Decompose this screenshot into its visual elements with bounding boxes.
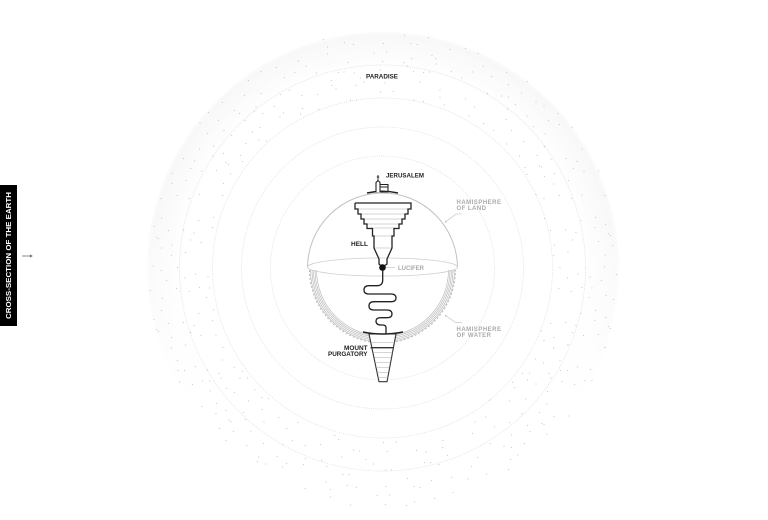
diagram: Mount Purgatory [363, 332, 403, 382]
equator ellipse [308, 258, 458, 276]
icon: Lucifer at centre of the earth [379, 264, 386, 271]
icon: Jerusalem city [367, 175, 398, 193]
label: Paradise: PARADISE [366, 74, 398, 80]
diagram: Hell funnel [355, 203, 411, 266]
outer heaven glow [140, 32, 630, 515]
label: Jerusalem: JERUSALEM [386, 174, 424, 180]
lucifer leader and label [386, 266, 425, 272]
callout: Hamisphere of Water: HAMISPHERE [456, 327, 501, 333]
callout: Hamisphere of Land [445, 200, 501, 222]
label: Hell: HELL [351, 242, 368, 248]
arrow: pointer to diagram [22, 255, 32, 257]
callout: Hamisphere of Land: OF LAND [456, 206, 487, 212]
star field [150, 35, 617, 505]
path: winding tunnel to Purgatory [364, 270, 396, 334]
sidebar tab: cross-section title [0, 185, 17, 326]
lucifer leader and label: LUCIFER [398, 266, 425, 272]
hemisphere of water terraces [310, 270, 456, 343]
hemisphere of land dome [308, 193, 458, 268]
panel: earth cross-section [308, 175, 458, 382]
callout: Hamisphere of Land: HAMISPHERE [456, 200, 501, 206]
callout: Hamisphere of Water: OF WATER [456, 333, 492, 339]
concentric sphere rings [180, 65, 586, 471]
label: Mount Purgatory [328, 346, 368, 358]
panel: celestial spheres background [140, 32, 630, 515]
label: Mount Purgatory: MOUNT [344, 346, 368, 352]
callout: Hamisphere of Water [445, 315, 501, 339]
sidebar tab: cross-section title: CROSS-SECTION OF THE EARTH [4, 192, 13, 319]
label: Mount Purgatory: PURGATORY [328, 352, 368, 358]
